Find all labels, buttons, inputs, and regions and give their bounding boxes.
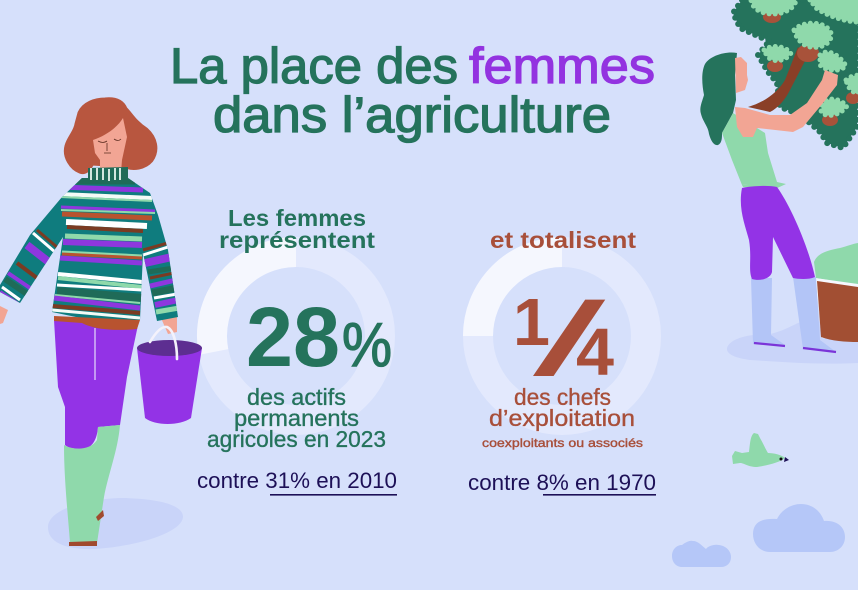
ground shadow <box>727 320 858 364</box>
description: actifs permanents: agricoles en 2023 <box>207 426 386 452</box>
boots <box>751 277 836 352</box>
hair <box>700 53 737 145</box>
comparison: contre 8% en 1970: contre 8% en 1970 <box>468 470 656 495</box>
big fraction: 1/4: 4 <box>576 315 614 390</box>
fruit <box>763 11 858 126</box>
heading: et totalisent: et totalisent <box>490 227 636 253</box>
boot soles <box>69 510 104 546</box>
sweater <box>0 167 179 330</box>
boots <box>64 425 120 543</box>
hand right <box>161 316 177 334</box>
description: actifs permanents <box>207 384 386 452</box>
description: actifs permanents: des actifs <box>247 384 346 410</box>
big number: 28%: % <box>342 311 392 380</box>
description: actifs permanents: permanents <box>234 405 359 431</box>
description: chefs d'exploitation: d’exploitation <box>489 405 635 431</box>
icon: large cloud <box>753 504 845 552</box>
title: La place des <box>170 38 458 94</box>
donut chart: 28% <box>212 252 380 420</box>
face <box>93 118 127 172</box>
description: chefs d'exploitation: des chefs <box>514 384 611 410</box>
big fraction: 1/4: / <box>533 281 607 397</box>
sweater hem <box>54 316 140 330</box>
top <box>722 113 786 189</box>
title <box>170 38 655 143</box>
comparison: contre 31% en 2010: contre 31% en 2010 <box>197 468 397 493</box>
title: dans l’agriculture <box>213 87 611 143</box>
hair <box>66 100 155 172</box>
legs <box>54 320 138 449</box>
ground shadow <box>48 498 183 549</box>
arm <box>735 70 838 137</box>
hand left <box>0 306 8 324</box>
panel: one quarter statistic <box>468 227 656 496</box>
tree foliage <box>733 0 858 148</box>
collar <box>88 167 128 181</box>
face <box>735 57 748 93</box>
icon: small cloud <box>672 541 731 567</box>
panel: 28% statistic <box>197 205 397 496</box>
leaves <box>751 0 858 115</box>
heading: les femmes représentent: représentent <box>219 227 375 253</box>
illustration: woman picking fruit <box>700 0 858 364</box>
heading: les femmes représentent <box>219 205 375 253</box>
big fraction: 1/4: 1 <box>513 285 550 360</box>
icon: bird <box>732 433 789 467</box>
donut chart: one quarter <box>478 252 646 420</box>
pants <box>741 186 815 280</box>
title: femmes <box>469 38 655 94</box>
leg crease <box>94 328 96 380</box>
flower pot <box>815 278 858 342</box>
tree branch <box>748 47 807 112</box>
boot soles <box>754 343 836 352</box>
big number: 28% <box>246 290 392 384</box>
big number: 28%: 28 <box>246 290 340 384</box>
heading: les femmes représentent: Les femmes <box>228 205 366 231</box>
description: chefs d'exploitation <box>482 384 643 450</box>
bucket <box>137 327 202 424</box>
plant <box>814 243 858 285</box>
face details <box>98 139 121 153</box>
illustration: woman with bucket <box>0 100 202 549</box>
description: chefs d'exploitation: coexploitants ou associés <box>482 436 643 450</box>
